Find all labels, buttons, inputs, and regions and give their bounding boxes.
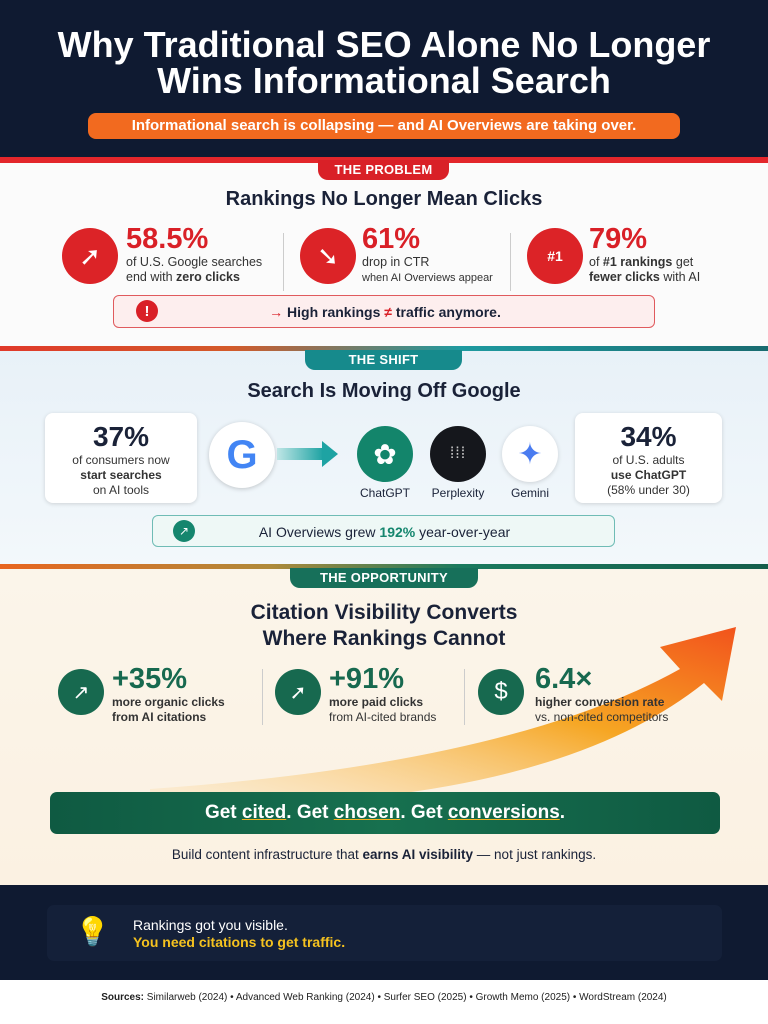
icon: badge #1 (527, 228, 583, 284)
stat: +35%: more organic clicks (112, 695, 225, 709)
icon: chatgpt (357, 426, 413, 500)
panel: problem (0, 163, 768, 348)
footer box: You need citations to get traffic. (133, 934, 345, 950)
icon: bulb: 💡 (75, 916, 110, 947)
stat 2 (300, 223, 493, 284)
icon: perplexity: Perplexity (432, 486, 484, 500)
heading (251, 601, 517, 650)
stat: 6.4x: 6.4× (535, 663, 592, 695)
stat 2: when AI Overviews appear (362, 272, 493, 284)
big arrow (150, 627, 736, 792)
heading: Citation Visibility Converts (251, 601, 517, 624)
heading: Search Is Moving Off Google (247, 380, 521, 402)
stat 1: end with zero clicks (126, 270, 240, 284)
stat: +35% (58, 663, 225, 724)
icon: perplexity: ⁞⁞⁞ (450, 445, 466, 462)
box: 34%: (58% under 30) (607, 483, 690, 497)
stat: 6.4x (478, 663, 668, 724)
arrow (277, 448, 323, 460)
stat: 6.4x: vs. non-cited competitors (535, 710, 668, 724)
growth bar: AI Overviews grew 192% year-over-year (259, 524, 510, 540)
heading: Where Rankings Cannot (263, 627, 505, 650)
box: 37%: start searches (80, 468, 162, 482)
icon: google (209, 422, 275, 488)
box: 37%: of consumers now (72, 453, 170, 467)
stat 2: 61% (362, 223, 420, 255)
badge: the shift: THE SHIFT (349, 352, 418, 367)
stat 1 (62, 223, 262, 284)
stat: +35%: +35% (112, 663, 187, 695)
stat 2: drop in CTR (362, 255, 429, 269)
growth bar (152, 515, 615, 547)
box: 34%: 34% (620, 421, 677, 452)
icon: perplexity (430, 426, 486, 500)
icon: cursor (62, 228, 118, 284)
icon: chatgpt: ✿ (373, 438, 397, 470)
box: 34% (575, 413, 722, 503)
heading: Rankings No Longer Mean Clicks (226, 188, 542, 210)
icon: gemini (500, 426, 560, 500)
footer box (47, 905, 722, 961)
stat: +35%: from AI citations (112, 710, 206, 724)
stat: 6.4x: $ (494, 678, 508, 705)
stat 3: 79% (589, 223, 647, 255)
subtitle pill: Informational search is collapsing — and AI Overviews are taking over. (132, 117, 636, 134)
growth bar: ↗ (179, 524, 189, 538)
banner: Get cited. Get chosen. Get conversions. (205, 802, 565, 823)
box: 34%: use ChatGPT (611, 468, 686, 482)
stat: +91%: more paid clicks (329, 695, 423, 709)
box: 37%: on AI tools (93, 483, 149, 497)
box: 37%: 37% (93, 421, 149, 452)
badge: the shift (305, 350, 462, 370)
stat: 6.4x: higher conversion rate (535, 695, 664, 709)
stat: +91%: ➚ (290, 682, 306, 704)
callout: → High rankings ≠ traffic anymore. (269, 304, 501, 320)
badge: the problem: THE PROBLEM (335, 162, 432, 177)
icon: google: G (226, 432, 258, 476)
callout (113, 295, 655, 328)
icon: badge #1: #1 (547, 248, 563, 264)
title: Why Traditional SEO Alone No Longer (58, 24, 710, 65)
stat: +91%: from AI-cited brands (329, 710, 436, 724)
panel: opportunity (0, 569, 768, 885)
title: Wins Informational Search (157, 60, 611, 101)
stat: +35%: ↗ (73, 682, 89, 704)
stat 3: of #1 rankings get (589, 255, 693, 269)
stat 3 (527, 223, 700, 284)
box: 34%: of U.S. adults (612, 453, 685, 467)
icon: down arrow (300, 228, 356, 284)
badge: the opportunity: THE OPPORTUNITY (320, 570, 448, 585)
box: 37% (45, 413, 197, 503)
stat: +91%: +91% (329, 663, 404, 695)
icon: down arrow: ➘ (317, 240, 339, 270)
footer box: Rankings got you visible. (133, 917, 288, 933)
title (58, 24, 710, 101)
subtitle pill (88, 113, 680, 139)
stat 1: 58.5% (126, 223, 208, 255)
icon: chatgpt: ChatGPT (360, 486, 410, 500)
icon: gemini: Gemini (511, 486, 549, 500)
badge: the problem (318, 160, 449, 180)
sources: Sources: Similarweb (2024) • Advanced Web Ranking (2024) • Surfer SEO (2025) • Growth Memo (2025) • WordStream (2024) (101, 992, 667, 1003)
badge: the opportunity (290, 568, 478, 588)
stat: +91% (275, 663, 436, 724)
footer (0, 885, 768, 980)
icon: gemini: ✦ (517, 438, 543, 470)
callout: ! (144, 302, 150, 320)
stat 3: fewer clicks with AI (589, 270, 700, 284)
header (0, 0, 768, 158)
banner (50, 792, 720, 834)
panel: shift (0, 351, 768, 565)
subtext: Build content infrastructure that earns AI visibility — not just rankings. (172, 847, 596, 862)
icon: cursor: ➚ (79, 240, 101, 270)
stat 1: of U.S. Google searches (126, 255, 262, 269)
